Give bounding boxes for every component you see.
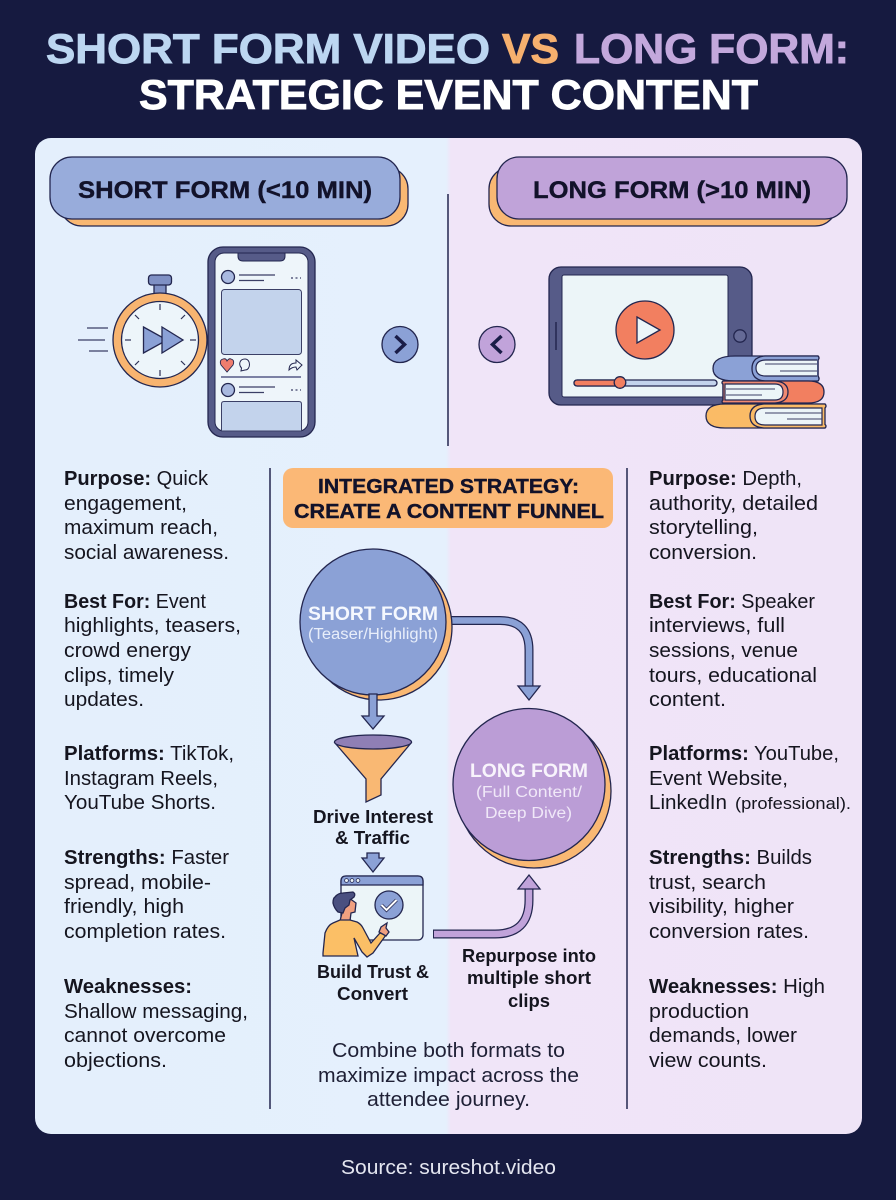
label: build trust: Build Trust & — [317, 962, 429, 982]
text block: short form details: Best For: Event — [64, 590, 206, 613]
circle: long form — [453, 708, 611, 868]
text block: long form details: sessions, venue — [649, 639, 798, 662]
text block: long form details: authority, detailed — [649, 492, 818, 515]
title: VS — [502, 25, 559, 72]
text block: short form details: Strengths: Faster — [64, 846, 229, 869]
heading: integrated strategy — [283, 468, 613, 528]
text block: short form details: completion rates. — [64, 920, 226, 943]
icon: back arrow — [479, 326, 515, 362]
text block: short form details: Instagram Reels, — [64, 767, 218, 790]
circle: long form: LONG FORM — [470, 760, 588, 782]
text block: short form details: spread, mobile- — [64, 871, 211, 894]
icon: tablet with video — [549, 267, 752, 405]
text block: short form details: Purpose: Quick — [64, 467, 209, 490]
circle: short form: SHORT FORM — [308, 603, 438, 625]
source: Source: sureshot.video — [341, 1157, 556, 1179]
text block: long form details: storytelling, — [649, 516, 758, 539]
text block: long form details: Purpose: Depth, — [649, 467, 802, 490]
text block: long form details: demands, lower — [649, 1024, 797, 1047]
heading: integrated strategy: CREATE A CONTENT FUNNEL — [294, 500, 604, 523]
heading: integrated strategy: INTEGRATED STRATEGY: — [318, 475, 579, 498]
text block: long form details: Strengths: Builds — [649, 846, 812, 869]
text block: short form details: Shallow messaging, — [64, 1000, 248, 1023]
label: drive interest: Drive Interest — [313, 807, 433, 827]
text block: short form details: updates. — [64, 688, 144, 711]
text block: short form details: friendly, high — [64, 895, 184, 918]
icon: next arrow — [382, 326, 418, 362]
label: repurpose — [462, 946, 596, 1011]
icon: funnel — [334, 735, 412, 802]
text block: short form details: objections. — [64, 1049, 167, 1072]
text block: long form details: interviews, full — [649, 614, 785, 637]
text block: short form details: cannot overcome — [64, 1024, 226, 1047]
text block: long form details: Platforms: YouTube, — [649, 742, 839, 765]
main panel — [35, 138, 862, 1134]
arrow: traffic to conversion — [362, 853, 384, 872]
text block: long form details: tours, educational — [649, 664, 817, 687]
panel: short form header: SHORT FORM (<10 MIN) — [78, 177, 372, 204]
label: repurpose: Repurpose into — [462, 946, 596, 966]
text block: long form details: conversion rates. — [649, 920, 809, 943]
text block: long form details: Weaknesses: High — [649, 975, 825, 998]
panel: short form header — [50, 157, 408, 226]
label: repurpose: multiple short — [467, 968, 591, 988]
text block: summary: attendee journey. — [367, 1088, 530, 1111]
text block: long form details: Event Website, — [649, 767, 788, 790]
text block: long form details: visibility, higher — [649, 895, 794, 918]
circle: long form: (Full Content/ — [476, 784, 583, 801]
title — [46, 25, 849, 118]
icon: speed lines — [78, 328, 108, 351]
text block: short form details — [64, 467, 248, 1072]
label: drive interest: & Traffic — [335, 828, 410, 848]
title: SHORT FORM VIDEO — [46, 25, 490, 72]
text block: short form details: highlights, teasers, — [64, 614, 241, 637]
text block: short form details: maximum reach, — [64, 516, 218, 539]
text block: summary: maximize impact across the — [318, 1064, 579, 1087]
icon: phone — [208, 247, 315, 437]
circle: short form: (Teaser/Highlight) — [308, 626, 438, 643]
panel: long form header — [489, 157, 847, 226]
arrow: short form to funnel — [362, 694, 384, 729]
text block: short form details: clips, timely — [64, 664, 175, 687]
text block: short form details: Platforms: TikTok, — [64, 742, 234, 765]
circle: short form — [300, 549, 452, 700]
arrow: repurpose back to long form — [433, 875, 540, 934]
text block: short form details: engagement, — [64, 492, 187, 515]
text block: long form details — [649, 467, 851, 1072]
label: build trust — [317, 962, 429, 1004]
text block: summary: Combine both formats to — [332, 1039, 565, 1062]
icon: person at browser window — [323, 876, 423, 957]
text block: long form details: trust, search — [649, 871, 766, 894]
text block: short form details: YouTube Shorts. — [64, 791, 216, 814]
icon: stack of books — [706, 356, 826, 428]
circle: long form: Deep Dive) — [485, 805, 572, 822]
arrow: short form to long form — [448, 620, 540, 700]
text block: long form details: (professional). — [735, 795, 851, 813]
text block: summary — [318, 1039, 579, 1111]
text block: long form details: Best For: Speaker — [649, 590, 815, 613]
text block: long form details: content. — [649, 688, 726, 711]
icon: stopwatch — [113, 275, 207, 387]
title: STRATEGIC EVENT CONTENT — [139, 71, 758, 118]
label: build trust: Convert — [337, 984, 408, 1004]
text block: long form details: view counts. — [649, 1049, 767, 1072]
text block: long form details: LinkedIn — [649, 791, 727, 814]
text block: short form details: Weaknesses: — [64, 975, 192, 998]
panel: long form header: LONG FORM (>10 MIN) — [533, 177, 811, 204]
label: repurpose: clips — [508, 991, 550, 1011]
title: LONG FORM: — [574, 25, 849, 72]
text block: long form details: conversion. — [649, 541, 757, 564]
text block: short form details: crowd energy — [64, 639, 192, 662]
text block: long form details: production — [649, 1000, 749, 1023]
label: drive interest — [313, 807, 433, 848]
text block: short form details: social awareness. — [64, 541, 229, 564]
